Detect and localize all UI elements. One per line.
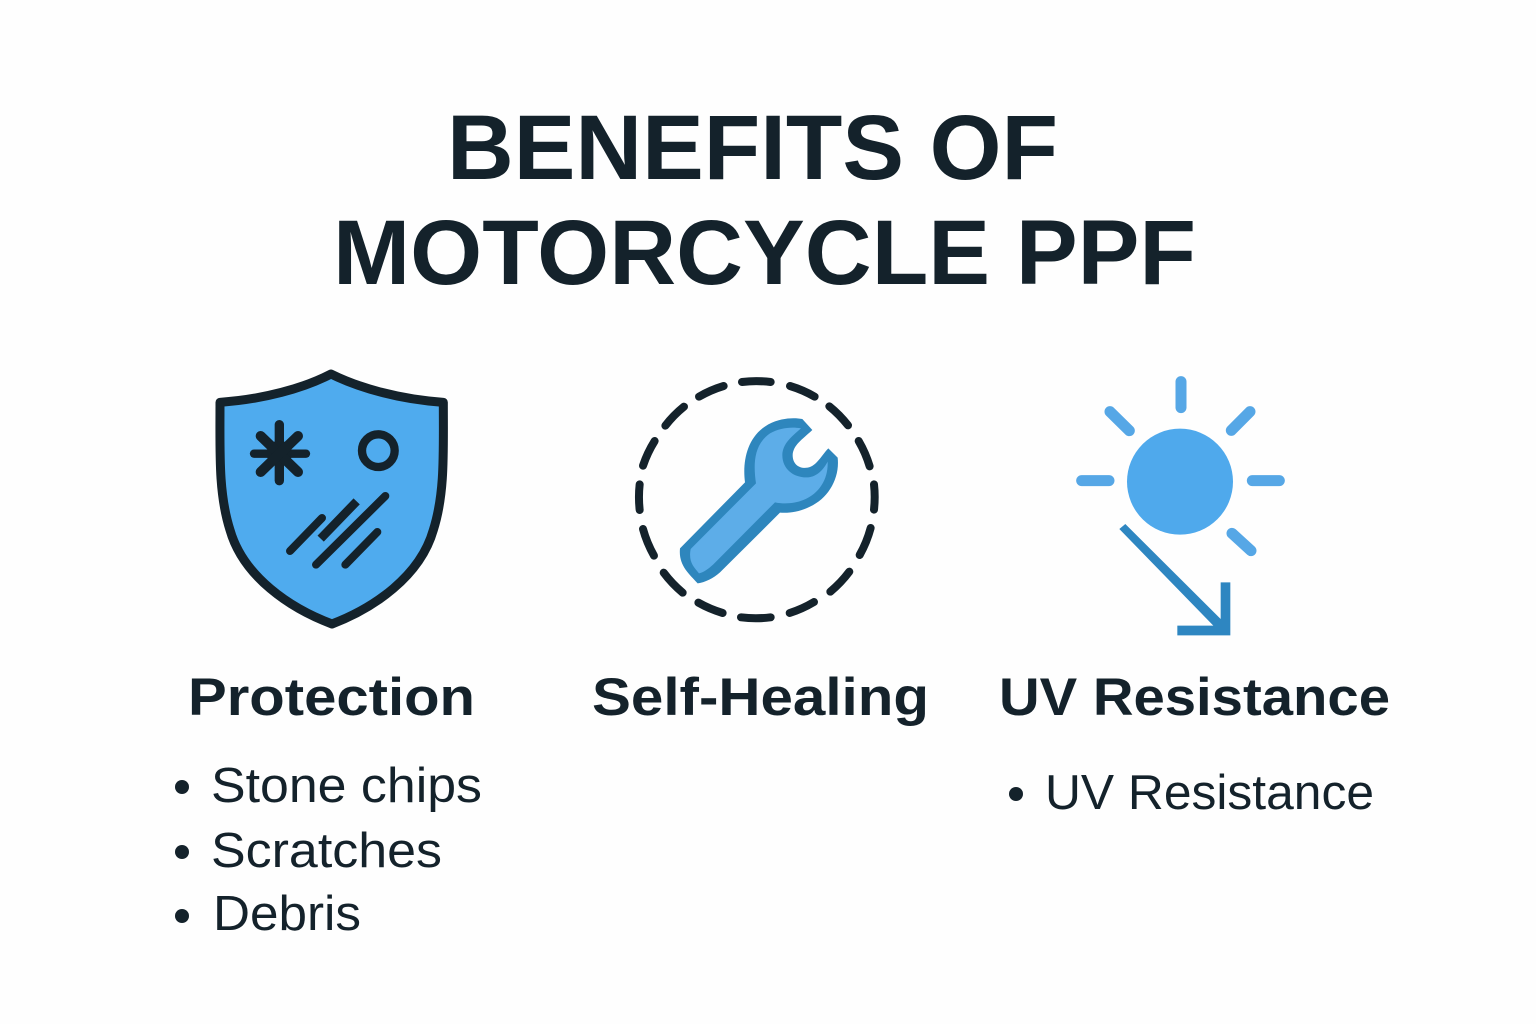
icon: dashed circle — [639, 381, 875, 618]
list: protection items: Stone chips — [211, 759, 482, 813]
panel: uv resistance — [999, 382, 1390, 820]
panel: protection — [175, 374, 482, 941]
heading: protection: Protection — [188, 668, 475, 727]
list: uv resistance item: UV Resistance — [1045, 766, 1374, 820]
title: MOTORCYCLE PPF — [333, 202, 1196, 304]
title: BENEFITS OF — [447, 97, 1058, 199]
heading: self-healing: Self-Healing — [592, 668, 929, 727]
icon: arrow — [1119, 524, 1230, 635]
list: protection items — [175, 759, 482, 941]
icon: sun — [1082, 382, 1279, 551]
heading: uv resistance: UV Resistance — [999, 668, 1390, 727]
icon: shield — [220, 374, 443, 624]
list: protection items: Scratches — [211, 824, 442, 878]
panel: self-healing — [592, 381, 929, 727]
title — [333, 97, 1196, 304]
icon: wrench — [680, 418, 838, 583]
list: protection items: Debris — [213, 887, 361, 941]
